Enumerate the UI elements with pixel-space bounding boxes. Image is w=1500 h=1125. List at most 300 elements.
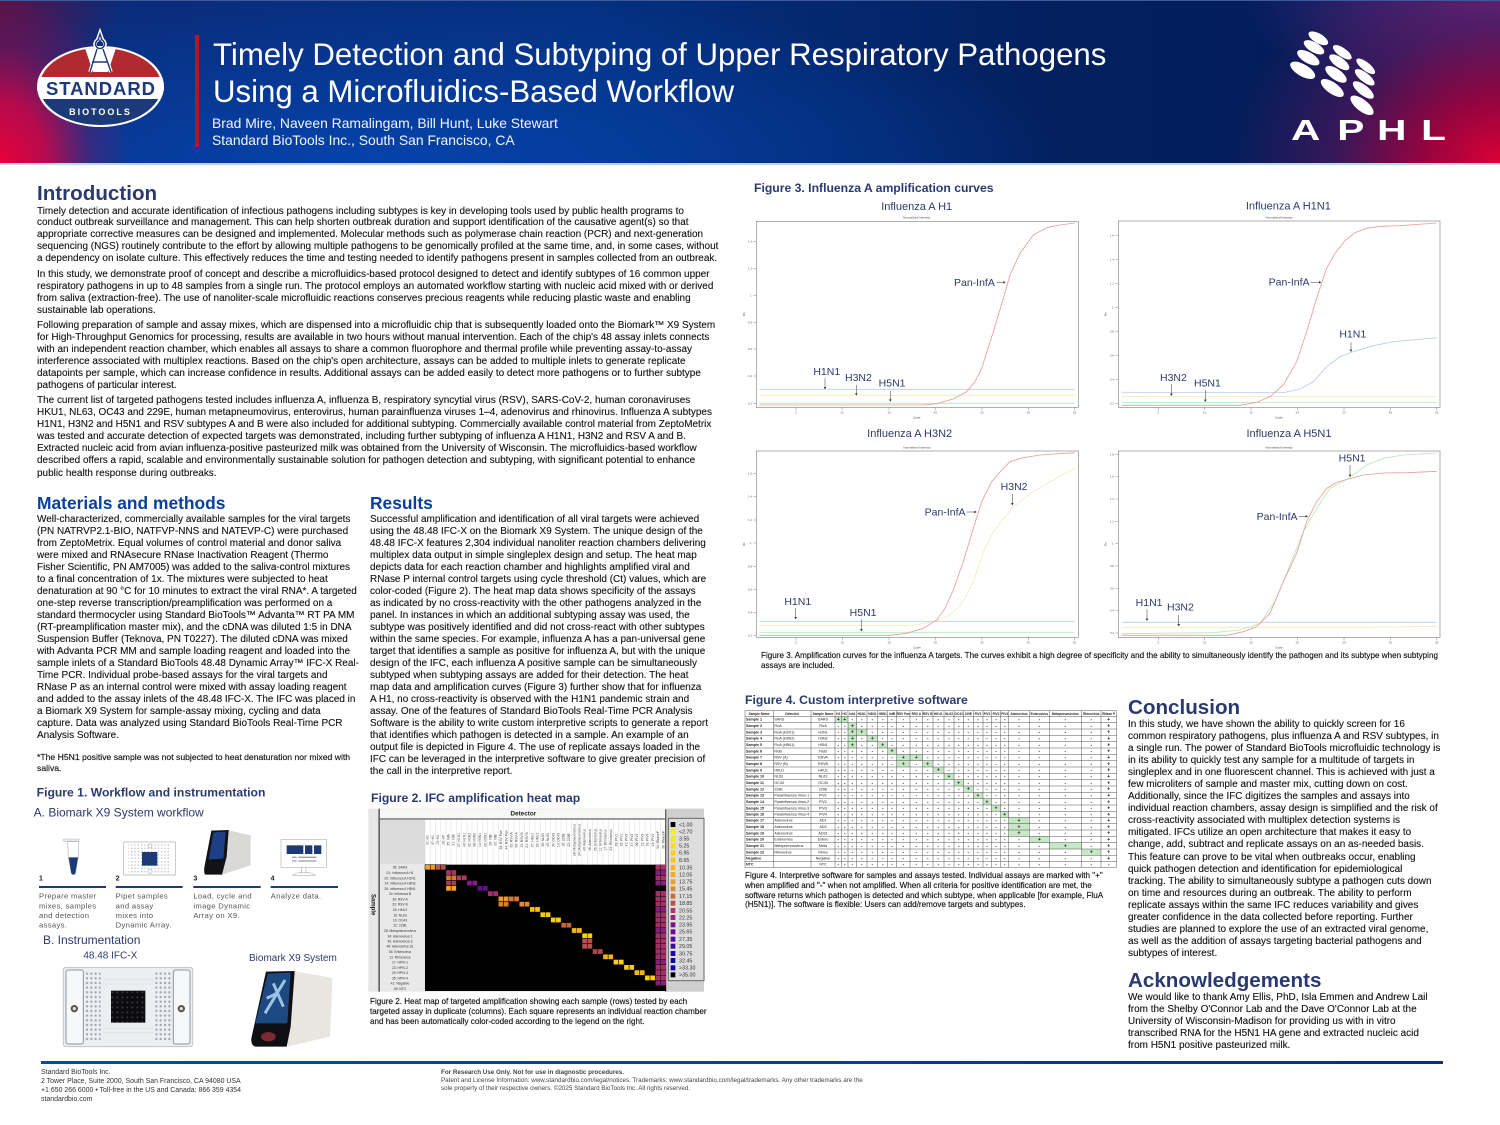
- chart: Influenza A H1N1: Normalized Intensity: [1265, 216, 1293, 220]
- heat map column labels: 44: RSV Pan: [504, 830, 508, 850]
- table detected column: SARS: [774, 718, 785, 722]
- chart: Influenza A H1N1: 35: [1435, 411, 1439, 415]
- text: introduction paragraph 4: [36, 395, 712, 479]
- chart: Influenza A H1: 35: [1073, 411, 1077, 415]
- chart: Influenza A H3N2: Cycle: [913, 646, 921, 650]
- heat map row labels: 29: HPIV-3: [392, 971, 408, 975]
- text: conclusion: In this study, we have shown the ability to quickly screen for 16: [1128, 719, 1405, 730]
- chart: Influenza A H3N2: Influenza A H3N2: [867, 428, 952, 440]
- heat map legend: >35.00: [679, 973, 695, 979]
- chart: Influenza A H1N1: 0.2: [1110, 401, 1114, 405]
- chart: Influenza A H3N2: 10: [841, 641, 844, 645]
- table detected column: Metapneumovirus: [774, 844, 804, 848]
- table header: RNase P: [1102, 712, 1115, 716]
- chart: Influenza A H1: Influenza A H1: [881, 201, 952, 213]
- table first column: Sample 13: [746, 794, 764, 798]
- heat map legend: >33.30: [679, 966, 695, 972]
- heading: Materials and methods: Materials and methods: [37, 493, 225, 513]
- chart: Influenza A H1N1: Rn: [1104, 312, 1108, 316]
- table call marks: --++------------------+: [837, 730, 1110, 736]
- heat map row labels: 28: Metapneumovirus: [384, 929, 416, 933]
- text: results: subtyped when subtyping assays are added for their detection. The heat: [370, 670, 688, 681]
- chart: Influenza A H1N1: [1104, 201, 1440, 420]
- heat map column labels: 19: H5: [441, 835, 445, 845]
- table header: InfA: [849, 712, 856, 716]
- text: introduction paragraph 1: conduct outbreak surveillance and management. This can help shorten outbreak duration and support identification of the causative agent(s) so that: [37, 217, 689, 228]
- chart: Influenza A H5N1: 5: [1157, 641, 1159, 645]
- workflow step 4: [271, 875, 338, 901]
- caption: figure 4: software returns which pathogen is detected and which subtype, when applicable [for example, FluA: [745, 891, 1103, 900]
- table first column: Sample 3: [746, 730, 762, 734]
- caption: figure 3: Figure 3. Amplification curves for the influenza A targets. The curves exhibit a high degree of specificity and the ability to simultaneously identify the pathogen and its subtype when subtyping: [761, 651, 1438, 660]
- table header: H1: [836, 712, 841, 716]
- table first column: Sample 11: [746, 781, 764, 785]
- chart: Influenza A H1: 15: [887, 411, 891, 415]
- header banner: [0, 0, 1500, 165]
- heat map row labels: 26: Influenza A H5N1: [384, 887, 416, 891]
- text: introduction paragraph 3: interference associated with multiplex reactions. Based on the chip's open architecture, assays can be added to multiple inlets to generate replicate: [37, 356, 686, 367]
- label: Biomark X9 System: Biomark X9 System: [249, 953, 337, 964]
- heading: Results: Results: [370, 493, 433, 513]
- text: conclusion: individual reaction chambers, assay design is simplified and the risk of: [1128, 803, 1438, 814]
- authors and affiliation: Standard BioTools Inc., South San Francisco, CA: [212, 132, 515, 148]
- table first column: Sample 5: [746, 743, 762, 747]
- workflow step 2: mixes into: [116, 911, 153, 920]
- text: materials and methods: a Biomark X9 System for sample-assay mixing, cycling and data: [37, 706, 321, 717]
- table sample column: Entero: [818, 838, 828, 842]
- icon: sample tube: [63, 839, 80, 875]
- heading: figure 4: Figure 4. Custom interpretive software: [745, 693, 968, 707]
- heat map column labels: 43: H1N1: [462, 833, 466, 847]
- table call marks: ------------------+---+: [837, 831, 1110, 837]
- chart: Influenza A H3N2: 0.8: [748, 564, 752, 568]
- text: materials and methods: with Advanta PCR MM and sample loading reagent and loaded into the: [37, 646, 350, 657]
- chart: Influenza A H5N1: Cycle: [1275, 646, 1283, 650]
- chart: Influenza A H5N1: 15: [1249, 641, 1253, 645]
- caption: figure 2: targeted assay in duplicate (columns). Each square represents an individual reaction chamber: [370, 1007, 707, 1016]
- table sample column: PIV3: [819, 806, 827, 810]
- text: conclusion: tracking. The ability to simultaneously subtype a pathogen cuts down: [1128, 876, 1432, 887]
- heat map column labels: 10: OC43: [557, 833, 561, 847]
- table call marks: -----------+----------+: [837, 774, 1110, 780]
- heat map column labels: 18: PIV4: [646, 833, 650, 846]
- table sample column: RSVB: [818, 762, 829, 766]
- chart: Influenza A H1: 0.6: [748, 347, 752, 351]
- heat map column labels: 40: Adenovirus: [583, 829, 587, 851]
- icon: monitor: [281, 839, 327, 875]
- workflow step 1: mixes, samples: [39, 901, 96, 910]
- table sample column: Rhino: [818, 850, 828, 854]
- heat map column labels: 07: H1: [431, 835, 435, 845]
- workflow step 3: 3: [193, 875, 197, 882]
- heat map row labels: 11: Rhinovirus: [389, 955, 411, 959]
- text: materials and methods: Suspension Buffer (Teknova, PN T0227). The diluted cDNA was mixed: [37, 634, 348, 645]
- heat map column labels: 25: InfA: [447, 833, 451, 846]
- heat map column labels: 33: HKU1: [536, 833, 540, 847]
- text: results: IFC can be leveraged in the interpretive software to give greater precision of: [370, 754, 705, 765]
- workflow step 1: 1: [39, 875, 43, 882]
- table detected column: Parainfluenza Virus-3: [774, 806, 809, 810]
- chart: Influenza A H3N2: 1: [750, 541, 752, 545]
- table detected column: Enterovirus: [774, 838, 793, 842]
- text: conclusion: on time and resources during an outbreak. The ability to perform: [1128, 888, 1412, 899]
- table detected column: Adenovirus: [774, 825, 793, 829]
- heat map column labels: 16: 229E: [562, 833, 566, 847]
- heat map row labels: 40: Adenovirus-3: [388, 940, 413, 944]
- table header: Sample Name: [749, 712, 770, 716]
- chart: Influenza A H5N1: 1.2: [1110, 519, 1114, 523]
- table sample column: H5N1: [818, 743, 828, 747]
- text: conclusion: quick pathogen detection and identification for epidemiological: [1128, 864, 1402, 875]
- table detected column: Parainfluenza Virus-4: [774, 813, 809, 817]
- text: introduction paragraph 4: H1N1, H3N2 and H5N1 and RSV subtypes A and B were also included for additional subtyping. Commercially available control material from ZeptoMetrix: [37, 419, 711, 430]
- chart: Influenza A H1N1: Influenza A H1N1: [1246, 201, 1331, 213]
- table first column: Sample 4: [746, 737, 763, 741]
- heat map row labels: 41: Negative: [391, 982, 409, 986]
- heat map legend: 30.75: [679, 951, 692, 957]
- heat map header: Sample: [369, 894, 375, 916]
- heat map column labels: 02: H3N2: [468, 833, 472, 847]
- table header: Rhinovirus: [1083, 712, 1100, 716]
- table detected column: HKU1: [774, 768, 784, 772]
- workflow step 3: Array on X9.: [193, 911, 240, 920]
- text: introduction paragraph 3: with an independent reaction chamber, which enables all assays to share a common fluorophore and thermal profile while preventing assay-to-assay: [37, 344, 692, 355]
- text: materials and methods: sample inlets of a Standard BioTools 48.48 Dynamic Array™ IFC-X Real-: [37, 658, 359, 669]
- table header: H1N1: [858, 712, 866, 716]
- table call marks: --+-------------------+: [837, 723, 1110, 729]
- text: conclusion: common respiratory pathogens, plus influenza A and RSV subtypes, in: [1128, 731, 1439, 742]
- chart: Influenza A H1N1: 30: [1389, 411, 1392, 415]
- heat map legend: 23.95: [679, 923, 692, 929]
- text: acknowledgements: University of Wisconsin-Madison for providing us with in vitro: [1128, 1016, 1396, 1027]
- table detected column: RSV (A): [774, 756, 788, 760]
- workflow step 2: 2: [116, 875, 120, 882]
- image: 48.48 IFC-X chip: [63, 967, 193, 1047]
- chart: Influenza A H5N1: 0.2: [1110, 631, 1114, 635]
- chart: Influenza A H3N2: Normalized Intensity: [903, 446, 931, 450]
- text: acknowledgements: transcribed RNA for the H5N1 HA gene and extracted nucleic acid: [1128, 1028, 1419, 1039]
- table first column: Negative: [746, 857, 761, 861]
- table header: PIV3: [993, 712, 1000, 716]
- text: materials and methods: were mixed and RNAsecure RNase Inactivation Reagent (Thermo: [37, 550, 328, 561]
- table detected column: FluB: [774, 749, 782, 753]
- text: conclusion: replicate assays within the same IFC reduces variability and gives: [1128, 900, 1418, 911]
- table first column: NTC: [746, 863, 754, 867]
- text: introduction paragraph 1: appropriate corrective measures can be designed and implemented. Molecular methods such as polymerase chain reaction (PCR) and next-generation: [37, 229, 703, 240]
- heat map row labels: [380, 865, 424, 991]
- text: acknowledgements: from H5N1 positive pasteurized milk.: [1128, 1040, 1290, 1051]
- table sample column: OC43: [818, 781, 828, 785]
- footnote: H5N1 sample: saliva.: [37, 763, 61, 773]
- text: acknowledgements: [1128, 992, 1428, 1051]
- table sample column: FluB: [819, 749, 827, 753]
- chart: Influenza A H5N1: 1.6: [1110, 475, 1114, 479]
- text: introduction paragraph 3: [36, 320, 715, 391]
- heat map column labels: 35: PIV1: [619, 833, 623, 846]
- chart: Influenza A H1: Pan-InfA: [954, 277, 995, 289]
- caption: figure 2: and has been automatically color-coded according to the legend on the right.: [370, 1017, 644, 1026]
- chart: Influenza A H3N2: 35: [1073, 641, 1077, 645]
- table sample column: RSVA: [818, 756, 828, 760]
- heat map column labels: 41: PIV2: [625, 833, 629, 846]
- table call marks: ------------------+---+: [837, 824, 1110, 830]
- heat map row labels: 06: Enterovirus: [389, 950, 412, 954]
- caption: figure 4: when amplified and "-" when not amplified. When all criteria for positive identification are met, the: [745, 881, 1092, 890]
- text: conclusion: This feature can prove to be vital when outbreaks occur, enabling: [1128, 852, 1416, 863]
- table call marks: ++--------------------+: [837, 717, 1110, 723]
- logo: Standard BioTools: BIOTOOLS: [69, 107, 132, 117]
- table header: H5N1: [879, 712, 887, 716]
- text: results: that identifies which pathogen is detected in a sample. An example of an: [370, 730, 689, 741]
- table sample column: AD3: [819, 825, 827, 829]
- chart: Influenza A H1: H1N1: [813, 366, 840, 378]
- heat map column labels: 09: RSV A: [515, 832, 519, 848]
- text: introduction paragraph 3: Following preparation of sample and assay mixes, which are dispensed into a microfluidic chip that is subsequently loaded onto the Biomark™ X9 System: [37, 320, 715, 331]
- chart: Influenza A H1: H3N2: [845, 372, 872, 384]
- heading: Introduction: Introduction: [37, 182, 157, 205]
- chart: Influenza A H5N1: 35: [1435, 641, 1439, 645]
- text: conclusion: a single run. The power of Standard BioTools microfluidic technology is: [1128, 743, 1440, 754]
- heat map column labels: [425, 820, 665, 865]
- text: introduction paragraph 3: pathogens of particular interest.: [37, 380, 177, 391]
- text: materials and methods: denaturation at 90 °C for 10 minutes to extract the viral RNA*. A targeted: [37, 586, 357, 597]
- table call marks: -------------+--------+: [837, 787, 1110, 793]
- heat map legend: <2.70: [679, 829, 693, 835]
- caption: figure 3: [761, 651, 1438, 670]
- heat map row labels: 14: Influenza A H3N2: [384, 882, 416, 886]
- text: introduction paragraph 2: [37, 269, 713, 316]
- chart: Influenza A H1: 30: [1027, 411, 1030, 415]
- heat map column labels: 34: Metapneumovirus: [578, 824, 582, 856]
- chart: Influenza A H1N1: 0.6: [1110, 353, 1114, 357]
- heat map column labels: 32: InfB: [494, 833, 498, 846]
- chart: Influenza A H1N1: 0.4: [1110, 377, 1114, 381]
- table call marks: ------------------+---+: [837, 818, 1110, 824]
- caption: figure 2: Figure 2. Heat map of targeted amplification showing each sample (rows) tested by each: [370, 997, 687, 1006]
- subheading: B instrumentation: B. Instrumentation: [43, 933, 140, 947]
- chart: Influenza A H5N1: 20: [1296, 641, 1299, 645]
- chart: Influenza A H5N1: Rn: [1104, 542, 1108, 546]
- heading: figure 3: Figure 3. Influenza A amplification curves: [754, 181, 994, 195]
- heat map column labels: 46: Adenovirus: [588, 829, 592, 851]
- title: [213, 37, 1106, 109]
- table: figure 4 interpretive software output: [744, 710, 1117, 868]
- chart: Influenza A H5N1: Pan-InfA: [1257, 511, 1298, 523]
- heat map column labels: 24: PIV4: [651, 833, 655, 846]
- table call marks: ---------------------++: [837, 850, 1110, 856]
- table call marks: ----------------+-----+: [837, 806, 1110, 812]
- workflow step 1: and detection: [39, 911, 89, 920]
- heat map row labels: 45: NTC: [394, 987, 407, 991]
- chart: Influenza A H1: 5: [795, 411, 797, 415]
- table header: RSV Pan: [897, 712, 910, 716]
- chart: Influenza A H1: 0.8: [748, 320, 752, 324]
- text: results: the call in the interpretive report.: [370, 766, 512, 777]
- table detected column: FluA (H1N1): [774, 730, 794, 734]
- heat map legend: 5.25: [679, 844, 689, 850]
- table first column: Sample 12: [746, 787, 764, 791]
- table sample column: NTC: [819, 863, 827, 867]
- text: introduction paragraph 1: Timely detection and accurate identification of infectious pathogens including subtypes is key in developing tools used by public health programs to: [37, 206, 684, 216]
- chart: Influenza A H1N1: 0.8: [1110, 329, 1114, 333]
- heat map legend: 22.25: [679, 915, 692, 921]
- footnote: H5N1 sample: [37, 752, 350, 773]
- heat map row labels: 35: HPIV-4: [392, 976, 408, 980]
- table detected column: NL63: [774, 775, 783, 779]
- chart: Influenza A H3N2: H5N1: [850, 607, 877, 619]
- table call marks: --+-+-----------------+: [837, 736, 1110, 742]
- chart: Influenza A H1: 1.4: [748, 240, 752, 244]
- table detected column: 229E: [774, 787, 783, 791]
- table first column: Sample 22: [746, 850, 764, 854]
- footer: legal text: Patent and License Information: www.standardbio.com/legal/notices. Trademarks: www.standardbio.com/legal/trademarks. Any other trademarks are the: [441, 1077, 863, 1084]
- text: results: output file is depicted in Figure 4. The use of replicate assays loaded in the: [370, 742, 700, 753]
- heat map column labels: 20: H5N1: [483, 833, 487, 847]
- heading: Conclusion: Conclusion: [1128, 696, 1240, 719]
- heat map column labels: 06: PIV3: [635, 833, 639, 846]
- workflow step 2: Dynamic Array.: [116, 921, 172, 930]
- text: materials and methods: Fisher Scientific, PN AM7005) was added to the saliva-control mixtures: [37, 562, 350, 573]
- workflow step 2: and assay: [116, 901, 154, 910]
- chart: figure 2 heat map: [368, 808, 704, 992]
- text: conclusion: change, add, subtract and replicate assays on an as-needed basis.: [1128, 839, 1424, 850]
- heat map column labels: 37: H1N1: [457, 833, 461, 847]
- heat map column labels: 13: H3: [436, 835, 440, 845]
- text: introduction paragraph 2: In this study, we demonstrate proof of concept and describe a microfluidics-based protocol designed to detect and identify subtypes of 16 common upper: [37, 269, 710, 280]
- table detected column: RSV (B): [774, 762, 788, 766]
- chart: Influenza A H5N1: 30: [1389, 641, 1392, 645]
- table detected column: FluA: [774, 724, 782, 728]
- footer: legal text: [441, 1069, 863, 1092]
- footer rule: [41, 1061, 1443, 1064]
- heat map legend: 27.35: [679, 937, 692, 943]
- table call marks: ----------+-----------+: [837, 768, 1110, 774]
- table first column: Sample 17: [746, 819, 764, 823]
- heading: Acknowledgements: Acknowledgements: [1128, 969, 1321, 992]
- table first column: Sample 7: [746, 756, 762, 760]
- heat map legend: 10.35: [679, 865, 692, 871]
- text: conclusion: mitigated. IFCs utilize an open architecture that makes it easy to: [1128, 827, 1411, 838]
- table detected column: Rhinovirus: [774, 850, 792, 854]
- heat map header: Detector: [510, 811, 537, 818]
- text: materials and methods: capture. Data was analyzed using Standard BioTools Real-Time PCR: [37, 718, 342, 729]
- table sample column: PIV4: [819, 813, 827, 817]
- authors and affiliation: [212, 115, 558, 148]
- text: introduction paragraph 4: The current list of targeted pathogens tested includes influenza A, influenza B, respiratory syncytial virus (RSV), SARS-CoV-2, human coronaviruses: [37, 395, 690, 406]
- workflow step 1: [39, 875, 106, 930]
- text: conclusion: as well as the addition of assays targeting bacterial pathogens and: [1128, 936, 1422, 947]
- title: Timely Detection and Subtyping of Upper Respiratory Pathogens: [213, 37, 1106, 72]
- table header: InfB: [889, 712, 896, 716]
- chart: Influenza A H5N1: 0.6: [1110, 586, 1114, 590]
- chart: Influenza A H1: Rn: [742, 312, 746, 316]
- text: materials and methods: and added to the assay inlets of the 48.48 IFC-X. The IFC was placed in: [37, 694, 355, 705]
- chart: Influenza A H5N1: H3N2: [1167, 602, 1194, 614]
- text: introduction paragraph 4: Extracted nucleic acid from avian influenza-positive pasteurized milk was obtained from the University of Wisconsin. The microfluidics-based workflow: [37, 443, 697, 454]
- table first column: Sample 1: [746, 718, 762, 722]
- chart: Influenza A H5N1: H1N1: [1136, 597, 1163, 609]
- chart: Influenza A H1N1: 20: [1296, 411, 1299, 415]
- chart: Influenza A H3N2: 0.2: [748, 633, 752, 637]
- text: materials and methods: (PN NATRVP2.1-BIO, NATFVP-NNS and NATEVP-C) were purchased: [37, 526, 348, 537]
- chart: Influenza A H1N1: Cycle: [1275, 416, 1283, 420]
- table first column: Sample 18: [746, 825, 764, 829]
- table sample column: FluA: [819, 724, 827, 728]
- chart: Influenza A H3N2: 30: [1027, 641, 1030, 645]
- table sample column: PIV1: [819, 794, 827, 798]
- chart: Influenza A H3N2: 1.2: [748, 518, 752, 522]
- label: 48.48 IFC-X: 48.48 IFC-X: [83, 951, 138, 962]
- table first column: Sample 15: [746, 806, 764, 810]
- text: conclusion: cross-reactivity associated with multiplex detection systems is: [1128, 815, 1400, 826]
- table detected column: OC43: [774, 781, 784, 785]
- heat map row labels: 39: RSV A: [392, 897, 408, 901]
- table call marks: ------+---------------+: [837, 749, 1110, 755]
- logo: Standard BioTools: STANDARD: [46, 78, 155, 99]
- chart: Influenza A H1N1: Pan-InfA: [1269, 277, 1310, 289]
- table header: H3N2: [868, 712, 877, 716]
- table header: 229E: [965, 712, 972, 716]
- chart: Influenza A H5N1: 10: [1203, 641, 1207, 645]
- footer: legal text: sole property of their respective owners. ©2025 Standard BioTools Inc. All rights reserved.: [441, 1085, 690, 1092]
- chart: Influenza A H1N1: H1N1: [1339, 329, 1366, 341]
- heat map column labels: 17: Rhinovirus: [604, 829, 608, 851]
- table header: Enterovirus: [1031, 712, 1048, 716]
- chart: Influenza A H3N2: 25: [980, 641, 984, 645]
- table first column: Sample 2: [746, 724, 762, 728]
- table call marks: -----------------------: [837, 862, 1110, 868]
- text: acknowledgements: We would like to thank Amy Ellis, PhD, Isla Emmen and Andrew Lail: [1128, 992, 1428, 1003]
- footnote: H5N1 sample: *The H5N1 positive sample was not subjected to heat denaturation nor mixed with: [37, 752, 350, 762]
- chart: Influenza A H5N1: 0.8: [1110, 564, 1114, 568]
- heat map legend: 15.45: [679, 887, 692, 893]
- heat map legend: 18.85: [679, 901, 692, 907]
- text: acknowledgements: from the Shelby O'Connor Lab and the Dave O'Connor Lab at the: [1128, 1004, 1417, 1015]
- text: conclusion: singleplex and in one fluorescent channel. This is achieved with just a: [1128, 767, 1435, 778]
- heat map column labels: 03: RSV A: [509, 832, 513, 848]
- chart: Influenza A H3N2: 1.4: [748, 495, 752, 499]
- table header: RSV A: [912, 712, 922, 716]
- heat map column labels: 27: HKU1: [530, 833, 534, 847]
- workflow step 4: 4: [271, 875, 275, 882]
- text: results: color-coded (Figure 2). The heat map data shows specificity of the assays: [370, 586, 696, 597]
- text: results: [370, 514, 708, 777]
- caption: figure 4: Figure 4. Interpretive software for samples and assays tested. Individual assays are marked with "+": [745, 871, 1103, 880]
- text: introduction paragraph 1: [37, 206, 718, 264]
- text: materials and methods: Well-characterized, commercially available samples for the viral targets: [37, 514, 350, 525]
- text: introduction paragraph 4: HKU1, NL63, OC43 and 229E, human metapneumovirus, enterovirus, human parainfluenza viruses 1–4, adenovirus and rhinovirus. Influenza A subtypes: [37, 407, 712, 418]
- heat map legend: 29.05: [679, 944, 692, 950]
- text: results: design of the IFC, each influenza A positive sample can be simultaneously: [370, 658, 697, 669]
- footer: legal text: For Research Use Only. Not for use in diagnostic procedures.: [441, 1069, 624, 1076]
- chart: Influenza A H3N2: H1N1: [784, 596, 811, 608]
- table sample column: AD1: [819, 819, 827, 823]
- table header: PIV1: [975, 712, 982, 716]
- chart: Influenza A H1N1: 1.6: [1110, 233, 1114, 237]
- footer: company address: 2 Tower Place, Suite 2000, South San Francisco, CA 94080 USA: [41, 1078, 241, 1085]
- table sample column: Negative: [816, 857, 830, 861]
- heat map legend: 25.65: [679, 930, 692, 936]
- footer: company address: Standard BioTools Inc.: [41, 1069, 111, 1076]
- text: introduction paragraph 3: for High-Throughput Genomics for processing, results are available in two hours without manual intervention. Each of the chip's 48 assay inlets connects: [37, 332, 709, 343]
- chart: Influenza A H1N1: H3N2: [1160, 372, 1187, 384]
- chart: Influenza A H1: 20: [934, 411, 937, 415]
- table first column: Sample 9: [746, 768, 762, 772]
- heat map legend: [668, 818, 704, 981]
- chart: Influenza A H3N2: 15: [887, 641, 891, 645]
- text: introduction paragraph 2: from saliva (extraction-free). The use of nanoliter-scale microfluidic reactions conserves precious reagents while reducing plastic waste and enabling: [37, 293, 691, 304]
- footer: company address: standardbio.com: [41, 1096, 92, 1103]
